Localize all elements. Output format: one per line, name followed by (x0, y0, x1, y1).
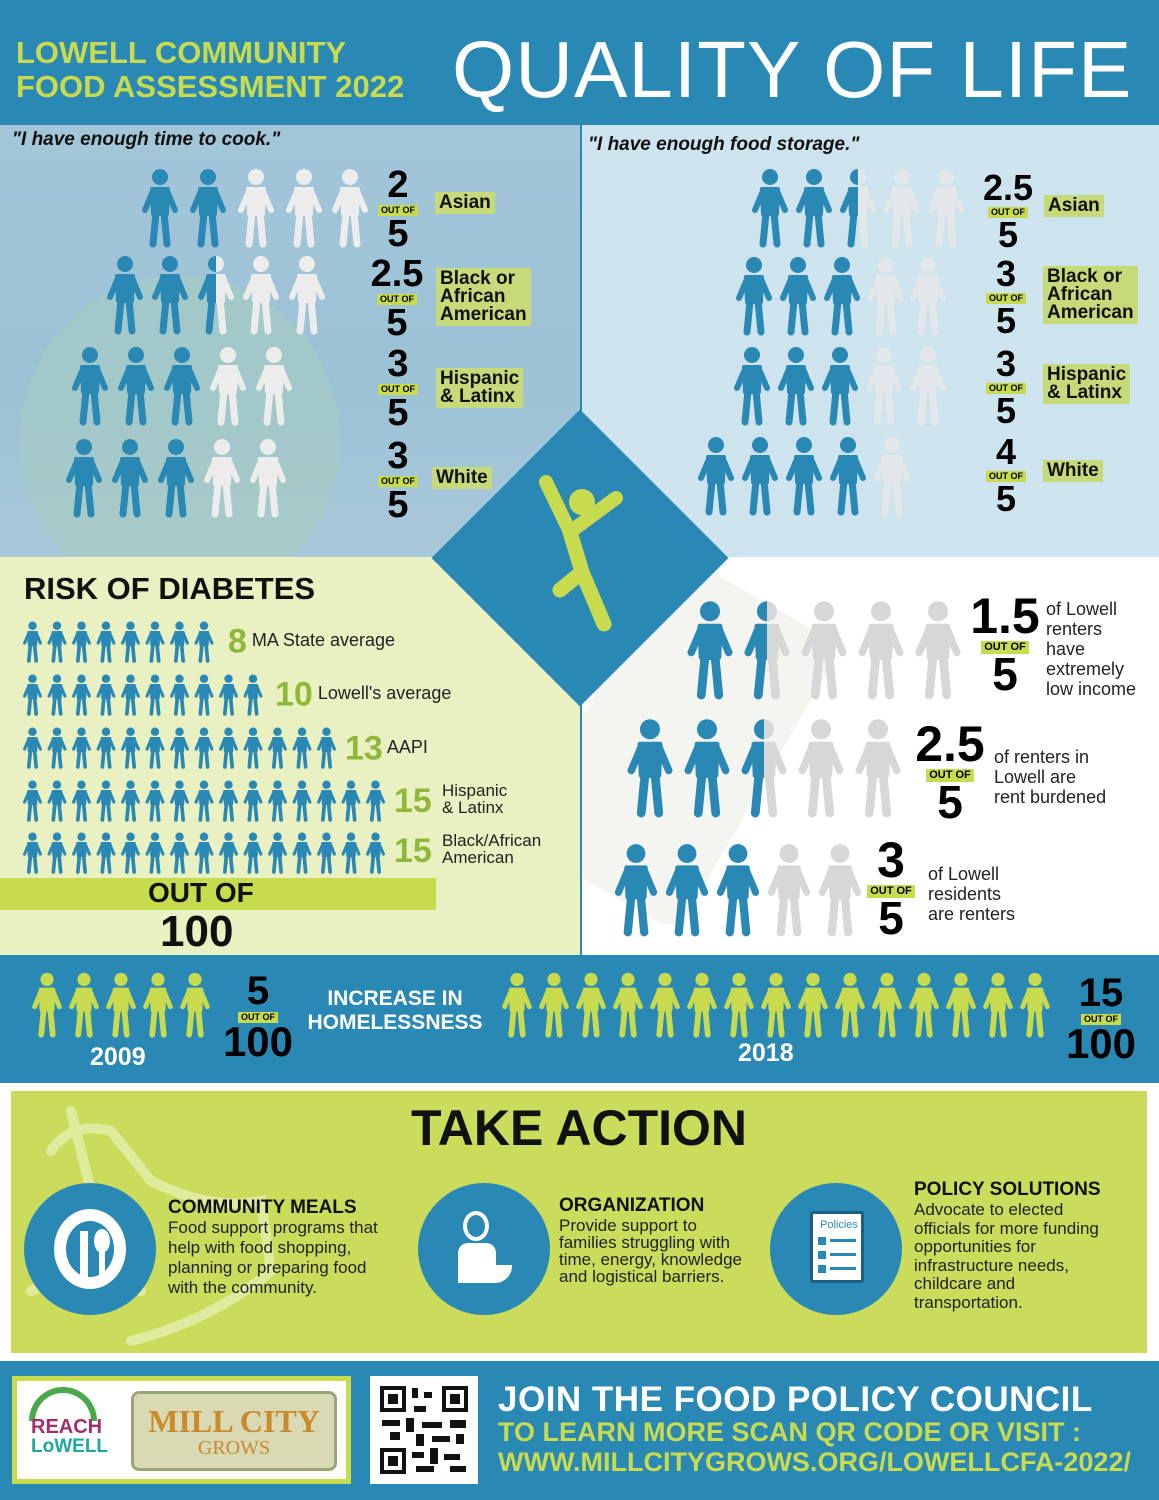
logos: REACH (31, 1416, 102, 1438)
text: Hispanic (440, 368, 519, 389)
panel: time to cook (0, 125, 580, 557)
panel: risk of diabetes: 100 (160, 907, 233, 956)
stat: white cook (378, 435, 418, 526)
stat: black storage: OUT OF (989, 293, 1023, 303)
2009: 2009 (90, 1043, 146, 1071)
logos: GROWS (198, 1437, 270, 1459)
band title (307, 987, 483, 1034)
icon: plate (24, 1183, 156, 1315)
text: low income (1046, 679, 1136, 699)
community meals text: COMMUNITY MEALS (168, 1197, 357, 1218)
stat: low income: OUT OF (984, 641, 1026, 653)
footer (0, 1361, 1159, 1500)
footer: WWW.MILLCITYGROWS.ORG/LOWELLCFA-2022/ (498, 1447, 1131, 1477)
text: & Latinx (440, 386, 515, 407)
stat: black cook: OUT OF (380, 294, 414, 304)
text: White (1047, 460, 1099, 481)
icon: policies: Policies (820, 1219, 858, 1231)
text: 10 Lowell's average (275, 675, 451, 713)
stat: white storage: OUT OF (989, 471, 1023, 481)
text: 13 AAPI (345, 729, 428, 767)
text: Black or (1047, 266, 1122, 287)
stat: black cook (371, 253, 423, 344)
stat: hispanic cook: 3 (387, 343, 409, 385)
homelessness band: OUT OF (1084, 1014, 1118, 1024)
text: African (440, 286, 505, 307)
2018: 2018 (738, 1039, 794, 1067)
join text: JOIN THE FOOD POLICY COUNCIL (498, 1380, 1093, 1419)
homelessness band: 100 (223, 1018, 293, 1065)
panel: risk of diabetes: OUT OF (148, 877, 254, 908)
text: Black or (440, 268, 515, 289)
text: residents (928, 884, 1001, 904)
stat: hispanic storage: OUT OF (989, 383, 1023, 393)
icon: policies (770, 1183, 902, 1315)
text: American (1047, 302, 1134, 323)
text: Hispanic (442, 781, 507, 800)
stat: rent burdened: OUT OF (929, 769, 971, 781)
icon: cook (418, 1183, 550, 1315)
stat: rent burdened: 2.5 (915, 716, 985, 772)
panel: food storage (582, 125, 1159, 557)
stat: low income: 5 (992, 648, 1018, 700)
header (0, 0, 1159, 125)
diabetes labels: 8 MA State average (228, 622, 395, 660)
homelessness figures (32, 972, 1050, 1038)
stat: renters: 3 (877, 832, 905, 888)
policy solutions text: POLICY SOLUTIONS (914, 1179, 1101, 1200)
stat: renters: 5 (878, 892, 904, 944)
stat: asian storage: OUT OF (991, 207, 1025, 217)
stat: asian cook: 2 (387, 164, 409, 206)
stat: white storage: 4 (996, 431, 1016, 472)
diabetes rows (23, 622, 385, 874)
stat: hispanic storage: 3 (996, 343, 1016, 384)
stat: white cook: 3 (387, 435, 409, 477)
stat: hispanic storage: 5 (996, 390, 1016, 431)
stat: black storage: 3 (996, 253, 1016, 294)
text: American (442, 848, 514, 867)
stat: asian storage: 2.5 (983, 167, 1033, 208)
text: White (436, 467, 488, 488)
take action panel (0, 1083, 1159, 1361)
rows: time to cook (66, 169, 368, 518)
text: Asian (1048, 195, 1100, 216)
text: of Lowell (1046, 599, 1117, 619)
heading: RISK OF DIABETES (24, 571, 315, 606)
homelessness band: 5 (247, 969, 269, 1013)
organization text: Provide support to families struggling with time, energy, knowledge and logistical barriers. (559, 1216, 742, 1286)
community meals text: Food support programs that help with food shopping, planning or preparing food with the community. (168, 1218, 378, 1297)
text: rent burdened (994, 787, 1106, 807)
renter rows (614, 601, 960, 936)
text: American (440, 304, 527, 325)
text: have (1046, 639, 1085, 659)
homelessness band (0, 955, 1159, 1083)
stat: rent burdened (915, 716, 985, 828)
stat: white cook: 5 (387, 484, 409, 526)
text: are renters (928, 904, 1015, 924)
stat: white cook: OUT OF (381, 476, 415, 486)
stat: white storage (986, 431, 1026, 519)
heading: "I have enough food storage." (588, 134, 859, 155)
band title: INCREASE IN (327, 987, 463, 1010)
stat: hispanic cook: OUT OF (381, 384, 415, 394)
policy solutions text: Advocate to elected officials for more funding opportunities for infrastructure needs, childcare and transportation. (914, 1200, 1099, 1312)
organization text: ORGANIZATION (559, 1195, 704, 1216)
stat: low income (970, 588, 1040, 700)
stat: low income: 1.5 (970, 588, 1040, 644)
stat: black cook: 2.5 (371, 253, 423, 295)
homelessness band: 100 (1066, 1020, 1136, 1067)
stat: asian storage: 5 (998, 214, 1018, 255)
stat: asian storage (983, 167, 1033, 255)
text: of renters in (994, 747, 1089, 767)
stat: black cook: 5 (386, 302, 408, 344)
logos: MILL CITY (148, 1403, 320, 1439)
stat: black storage: 5 (996, 300, 1016, 341)
subtitle (16, 35, 404, 104)
text: of Lowell (928, 864, 999, 884)
text: extremely (1046, 659, 1124, 679)
stat: asian cook: 5 (387, 213, 409, 255)
subtitle: FOOD ASSESSMENT 2022 (16, 69, 404, 104)
panel: renters (582, 557, 1159, 955)
panel: risk of diabetes (0, 557, 580, 955)
stat: hispanic cook: 5 (387, 392, 409, 434)
stat: black storage (986, 253, 1026, 341)
stat: rent burdened: 5 (937, 776, 963, 828)
stat: renters (867, 832, 915, 944)
heading: "I have enough time to cook." (12, 129, 280, 150)
text: Hispanic (1047, 364, 1126, 385)
stat: renters: OUT OF (870, 885, 912, 897)
text: 15 (394, 782, 432, 820)
footer: TO LEARN MORE SCAN QR CODE OR VISIT : (498, 1417, 1081, 1447)
homelessness band: OUT OF (241, 1012, 275, 1022)
band title: HOMELESSNESS (307, 1011, 483, 1034)
QR code (370, 1376, 478, 1484)
logos: LoWELL (31, 1436, 108, 1457)
out of 100 bar (0, 878, 436, 910)
homelessness band: 15 (1079, 971, 1123, 1015)
text: & Latinx (1047, 382, 1122, 403)
stat: asian cook (378, 164, 418, 255)
stat: white storage: 5 (996, 478, 1016, 519)
heading: TAKE ACTION (411, 1100, 747, 1156)
text: & Latinx (442, 798, 503, 817)
text: Asian (439, 192, 491, 213)
rows: food storage (698, 169, 964, 516)
text: 15 (394, 832, 432, 870)
stat: hispanic storage (986, 343, 1026, 431)
text: African (1047, 284, 1112, 305)
logos (12, 1376, 351, 1484)
text: renters (1046, 619, 1102, 639)
subtitle: LOWELL COMMUNITY (16, 35, 346, 70)
text: Black/African (442, 831, 541, 850)
stat: hispanic cook (378, 343, 418, 434)
stat: asian cook: OUT OF (381, 205, 415, 215)
center diamond with dancer icon (432, 410, 728, 706)
title: QUALITY OF LIFE (452, 25, 1132, 114)
text: Lowell are (994, 767, 1076, 787)
